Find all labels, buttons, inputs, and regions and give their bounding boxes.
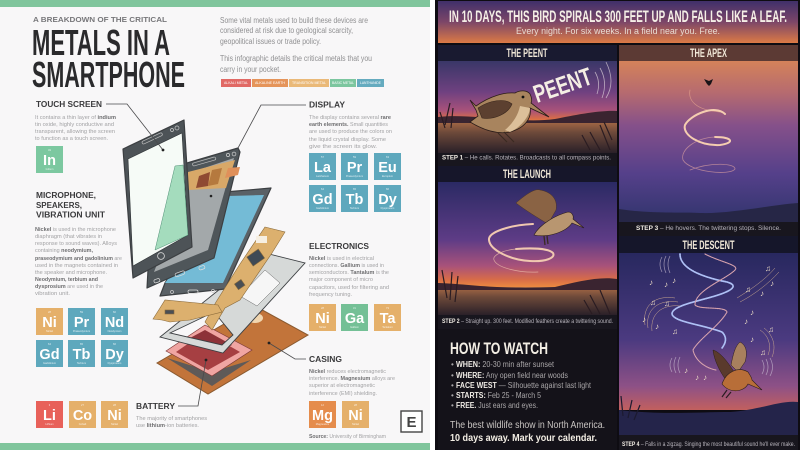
reeds and grass bbox=[440, 103, 612, 150]
watch tips list: • bbox=[451, 360, 454, 369]
section: microphone, speakers, vibration unit: vibration unit. bbox=[35, 291, 70, 297]
section: electronics: frequency tuning. bbox=[309, 292, 352, 298]
intro text: carry in your pocket. bbox=[220, 65, 281, 74]
section: touch screen: transparent, allowing the screen bbox=[35, 129, 115, 135]
header banner: Every night. For six weeks. In a field near you. Free. bbox=[516, 26, 720, 36]
logo: E: E bbox=[406, 414, 417, 431]
illustration: exploded smartphone bbox=[123, 120, 308, 394]
zigzag descent trail bbox=[672, 254, 736, 370]
element tiles: casing metals: Ni bbox=[348, 408, 363, 424]
watch tips list: WHERE: Any open field near woods bbox=[456, 371, 568, 380]
section: battery bbox=[36, 401, 207, 429]
panel: the launch: STEP 2 – Straight up. 300 feet. Modified feathers create a twittering sound. bbox=[442, 319, 613, 325]
section: casing: CASING bbox=[309, 355, 342, 364]
element tiles: display metals: Dy bbox=[378, 192, 397, 208]
element tiles: battery metals bbox=[36, 401, 128, 428]
element tiles: display metals: 64 bbox=[321, 187, 324, 191]
element tiles: display metals: Gadolinium bbox=[316, 206, 329, 210]
spiral flight trail bbox=[489, 224, 553, 272]
bird: woodcock rising bbox=[516, 190, 584, 245]
intro text bbox=[220, 16, 372, 74]
section: touch screen bbox=[35, 100, 116, 173]
closing message bbox=[450, 420, 605, 444]
section: electronics: capacitors, used for filtering and bbox=[309, 285, 389, 291]
element tiles: electronics metals: 28 bbox=[321, 306, 324, 310]
legend: metal categories bbox=[221, 79, 384, 87]
element tiles: display metals: Terbium bbox=[350, 206, 359, 210]
legend: metal categories: ALKALI METAL bbox=[224, 81, 248, 85]
inner frame layer bbox=[160, 253, 305, 353]
heading: breakdown kicker: A BREAKDOWN OF THE CRITICAL bbox=[33, 17, 168, 24]
circuit board layer bbox=[153, 227, 285, 330]
section: microphone, speakers, vibration unit: dysprosium are used in the bbox=[35, 284, 103, 290]
watch tips list: FACE WEST — Silhouette against last light bbox=[456, 381, 592, 390]
element tiles: microphone metals: 66 bbox=[113, 342, 116, 346]
element tiles: display metals: 63 bbox=[386, 155, 389, 159]
watch tips list: FREE. Just ears and eyes. bbox=[456, 401, 538, 410]
element tiles: microphone metals: Dysprosium bbox=[108, 361, 121, 365]
music notes and staves: ♫ bbox=[745, 285, 751, 294]
music notes and staves bbox=[642, 264, 779, 382]
section: microphone, speakers, vibration unit bbox=[35, 191, 128, 367]
source note: Source: University of Birmingham bbox=[309, 434, 386, 440]
bird: woodcock falling bbox=[713, 342, 762, 398]
label: PEENT sound: PEENT bbox=[530, 63, 596, 109]
element tiles: display metals: Pr bbox=[347, 160, 363, 176]
title: METALS IN A bbox=[32, 22, 170, 63]
panel: how to watch bbox=[438, 329, 617, 450]
callout line: casing bbox=[268, 342, 306, 359]
element tiles: battery metals: Cobalt bbox=[79, 422, 87, 426]
element tiles: battery metals: Co bbox=[73, 408, 92, 424]
music notes and staves: ♫ bbox=[765, 264, 771, 273]
callout line: display bbox=[238, 105, 306, 148]
element tiles: microphone metals: 28 bbox=[48, 310, 51, 314]
panel: metals in a smartphone bbox=[0, 0, 430, 450]
element tiles: microphone metals bbox=[36, 308, 128, 367]
title: SMARTPHONE bbox=[32, 54, 185, 95]
element tile: In bbox=[36, 146, 63, 173]
section: casing: interference (EMI) shielding. bbox=[309, 391, 377, 397]
section: electronics: major component of micro bbox=[309, 277, 373, 283]
element tiles: display metals: Tb bbox=[346, 192, 363, 208]
music notes and staves: ♫ bbox=[650, 298, 656, 307]
closing message: The best wildlife show in North America. bbox=[450, 420, 605, 431]
music notes and staves: ♪ bbox=[664, 280, 668, 289]
intro text: considered at risk due to geological scarcity, bbox=[220, 26, 353, 35]
section: electronics: ELECTRONICS bbox=[309, 242, 370, 251]
section: touch screen: It contains a thin layer of indium bbox=[35, 115, 116, 121]
element tiles: electronics metals: 73 bbox=[386, 306, 389, 310]
sound waves bbox=[660, 256, 772, 376]
music notes and staves: ♪ bbox=[750, 308, 754, 317]
element tiles: microphone metals: 60 bbox=[113, 310, 116, 314]
watch tips list: • bbox=[451, 401, 454, 410]
music notes and staves: ♪ bbox=[703, 373, 707, 382]
watch tips list: • bbox=[451, 371, 454, 380]
second phone bbox=[147, 148, 240, 288]
title bbox=[32, 22, 185, 95]
callout line: touch screen bbox=[106, 104, 164, 151]
element tiles: battery metals: 27 bbox=[81, 403, 84, 407]
element tiles: battery metals: 28 bbox=[113, 403, 116, 407]
section: battery: The majority of smartphones bbox=[136, 416, 207, 422]
bird: woodcock calling bbox=[470, 91, 549, 142]
section: touch screen: TOUCH SCREEN bbox=[36, 100, 102, 109]
section: display: give the screen its glow. bbox=[309, 144, 377, 150]
music notes and staves: ♪ bbox=[760, 289, 764, 298]
element tiles: display metals: Europium bbox=[382, 174, 393, 178]
panel: the apex: THE APEX bbox=[690, 46, 727, 60]
section: electronics: Nickel is used in electrical bbox=[309, 256, 374, 262]
bird: hovering silhouette bbox=[704, 79, 713, 86]
section: microphone, speakers, vibration unit: containing neodymium, bbox=[35, 248, 94, 254]
spiral flight trail bbox=[683, 90, 735, 172]
element tiles: electronics metals: Gallium bbox=[350, 325, 359, 329]
element tiles: battery metals: 3 bbox=[49, 403, 51, 407]
section: display: are used to produce the colors on bbox=[309, 129, 392, 135]
section: microphone, speakers, vibration unit: the speaker and microphone. bbox=[35, 270, 107, 276]
element tiles: battery metals: Lithium bbox=[45, 422, 54, 426]
element tiles: display metals: 57 bbox=[321, 155, 324, 159]
closing message: 10 days away. Mark your calendar. bbox=[450, 433, 597, 444]
music notes and staves: ♪ bbox=[770, 279, 774, 288]
panel: the peent: THE PEENT bbox=[506, 46, 548, 60]
music notes and staves: ♪ bbox=[750, 335, 754, 344]
header banner bbox=[438, 1, 798, 43]
intro text: This infographic details the critical metals that you bbox=[220, 54, 372, 63]
element tiles: microphone metals: Nickel bbox=[46, 329, 53, 333]
element tiles: display metals: Dysprosium bbox=[381, 206, 394, 210]
casing layer bbox=[157, 306, 308, 394]
element tiles: electronics metals: Ta bbox=[380, 311, 396, 327]
element tiles: display metals: Eu bbox=[378, 160, 397, 176]
element tiles: microphone metals: Praseodymium bbox=[73, 329, 90, 333]
element tiles: casing metals: Magnesium bbox=[316, 422, 329, 426]
element tiles: electronics metals: Nickel bbox=[319, 325, 326, 329]
element tiles: casing metals bbox=[309, 401, 369, 428]
section: microphone, speakers, vibration unit: diaphragm (that vibrates in bbox=[35, 234, 102, 240]
element tiles: battery metals: Nickel bbox=[111, 422, 118, 426]
element tiles: microphone metals: Gd bbox=[39, 347, 60, 363]
section: display: earth elements. Small quantities bbox=[309, 122, 388, 128]
element tiles: microphone metals: Terbium bbox=[77, 361, 86, 365]
section: microphone, speakers, vibration unit: SPEAKERS, bbox=[36, 201, 82, 210]
panel: the descent bbox=[619, 236, 798, 450]
section: display: the liquid crystal display. Some bbox=[309, 137, 386, 143]
music notes and staves: ♫ bbox=[760, 348, 766, 357]
section: microphone, speakers, vibration unit: Neodymium, terbium and bbox=[35, 277, 98, 283]
panel: how to watch: HOW TO WATCH bbox=[450, 339, 548, 358]
display layer bbox=[160, 188, 271, 296]
front phone bbox=[123, 120, 192, 278]
section: electronics: semiconductors. Tantalum is the bbox=[309, 270, 389, 276]
element tiles: display metals: Lanthanum bbox=[316, 174, 329, 178]
music notes and staves: ♪ bbox=[695, 373, 699, 382]
section: microphone, speakers, vibration unit: praseodymium and gadolinium are bbox=[35, 256, 122, 262]
section: microphone, speakers, vibration unit: MICROPHONE, bbox=[36, 191, 96, 200]
element tiles: display metals: Praseodymium bbox=[346, 174, 363, 178]
legend: metal categories: BASIC METAL bbox=[332, 81, 354, 85]
music notes and staves: ♪ bbox=[655, 322, 659, 331]
element tiles: display metals bbox=[309, 153, 401, 212]
section: casing: superior at electromagnetic bbox=[309, 383, 375, 389]
element tiles: microphone metals: Gadolinium bbox=[43, 361, 56, 365]
panel: bird sky dance bbox=[435, 0, 800, 450]
music notes and staves: ♪ bbox=[649, 278, 653, 287]
panel: the peent bbox=[438, 45, 617, 166]
element tiles: microphone metals: 59 bbox=[80, 310, 83, 314]
section: touch screen: to function as a touch screen. bbox=[35, 136, 108, 142]
panel: the launch bbox=[438, 166, 617, 329]
music notes and staves: ♫ bbox=[672, 327, 678, 336]
section: battery: BATTERY bbox=[136, 402, 176, 411]
element tile: In: Indium bbox=[46, 167, 53, 171]
section: casing: Nickel reduces electromagnetic bbox=[309, 369, 386, 375]
music notes and staves: ♪ bbox=[642, 315, 646, 324]
section: touch screen: tin oxide, highly conductive and bbox=[35, 122, 114, 128]
element tiles: microphone metals: Ni bbox=[42, 315, 57, 331]
element tiles: casing metals: 12 bbox=[321, 403, 324, 407]
element tiles: casing metals: 28 bbox=[354, 403, 357, 407]
watch tips list: WHEN: 20-30 min after sunset bbox=[456, 360, 555, 369]
element tiles: microphone metals: Tb bbox=[73, 347, 90, 363]
element tiles: display metals: 65 bbox=[353, 187, 356, 191]
section: microphone, speakers, vibration unit: used in the magnets contained in bbox=[35, 263, 118, 269]
element tiles: microphone metals: Neodymium bbox=[108, 329, 121, 333]
legend: metal categories: TRANSITION METAL bbox=[292, 81, 326, 85]
music notes and staves: ♪ bbox=[744, 317, 748, 326]
element tiles: electronics metals: 31 bbox=[353, 306, 356, 310]
element tiles: microphone metals: Dy bbox=[105, 347, 124, 363]
element tiles: battery metals: Li bbox=[43, 408, 56, 424]
element tile: In: In bbox=[43, 153, 56, 169]
element tile: In: 49 bbox=[48, 148, 51, 152]
watch tips list: • bbox=[451, 381, 454, 390]
section: display bbox=[309, 100, 401, 212]
section: display: The display contains several rare bbox=[309, 115, 391, 121]
element tiles: display metals: La bbox=[314, 160, 332, 176]
panel: the launch: THE LAUNCH bbox=[503, 167, 551, 181]
element tiles: electronics metals: Tantalum bbox=[382, 325, 393, 329]
intro text: geopolitical issues or trade policy. bbox=[220, 37, 321, 46]
music notes and staves: ♪ bbox=[672, 276, 676, 285]
element tiles: display metals: 66 bbox=[386, 187, 389, 191]
panel: the descent: THE DESCENT bbox=[682, 238, 735, 252]
section: microphone, speakers, vibration unit: Nickel is used in the microphone bbox=[35, 227, 116, 233]
music notes and staves: ♫ bbox=[664, 299, 670, 308]
element tiles: battery metals: Ni bbox=[107, 408, 122, 424]
element tiles: microphone metals: 65 bbox=[80, 342, 83, 346]
panel: the apex: STEP 3 – He hovers. The twittering stops. Silence. bbox=[636, 226, 781, 232]
intro text: Some vital metals used to build these devices are bbox=[220, 16, 368, 25]
element tiles: electronics metals bbox=[309, 304, 401, 331]
logo: E bbox=[401, 411, 422, 432]
element tiles: display metals: 59 bbox=[353, 155, 356, 159]
section: microphone, speakers, vibration unit: VIBRATION UNIT bbox=[36, 210, 105, 220]
music notes and staves: ♫ bbox=[768, 325, 774, 334]
callout line: battery bbox=[178, 359, 207, 406]
element tiles: casing metals: Nickel bbox=[352, 422, 359, 426]
panel: the peent: STEP 1 – He calls. Rotates. Broadcasts to all compass points. bbox=[442, 156, 611, 162]
element tiles: electronics metals: Ni bbox=[315, 311, 330, 327]
section: casing bbox=[309, 355, 395, 428]
watch tips list: STARTS: Feb 25 - March 5 bbox=[456, 391, 541, 400]
element tiles: electronics metals: Ga bbox=[345, 311, 365, 327]
element tiles: microphone metals: Pr bbox=[74, 315, 90, 331]
watch tips list bbox=[451, 360, 592, 410]
watch tips list: • bbox=[451, 391, 454, 400]
section: electronics bbox=[309, 242, 401, 331]
section: microphone, speakers, vibration unit: response to sound waves). Alloys bbox=[35, 241, 117, 247]
section: electronics: connections. Gallium is used in bbox=[309, 263, 384, 269]
element tiles: microphone metals: 64 bbox=[48, 342, 51, 346]
panel: the apex bbox=[619, 45, 798, 236]
element tiles: display metals: Gd bbox=[312, 192, 333, 208]
battery layer bbox=[166, 325, 252, 386]
section: battery: use lithium-ion batteries. bbox=[136, 423, 199, 429]
legend: metal categories: ALKALINE EARTH bbox=[255, 81, 286, 85]
section: display: DISPLAY bbox=[309, 100, 346, 110]
element tiles: microphone metals: Nd bbox=[105, 315, 124, 331]
music notes and staves: ♪ bbox=[684, 366, 688, 375]
section: casing: interference. Magnesium alloys are bbox=[309, 376, 395, 382]
legend: metal categories: LANTHANIDE bbox=[360, 81, 381, 85]
element tiles: casing metals: Mg bbox=[312, 408, 333, 424]
